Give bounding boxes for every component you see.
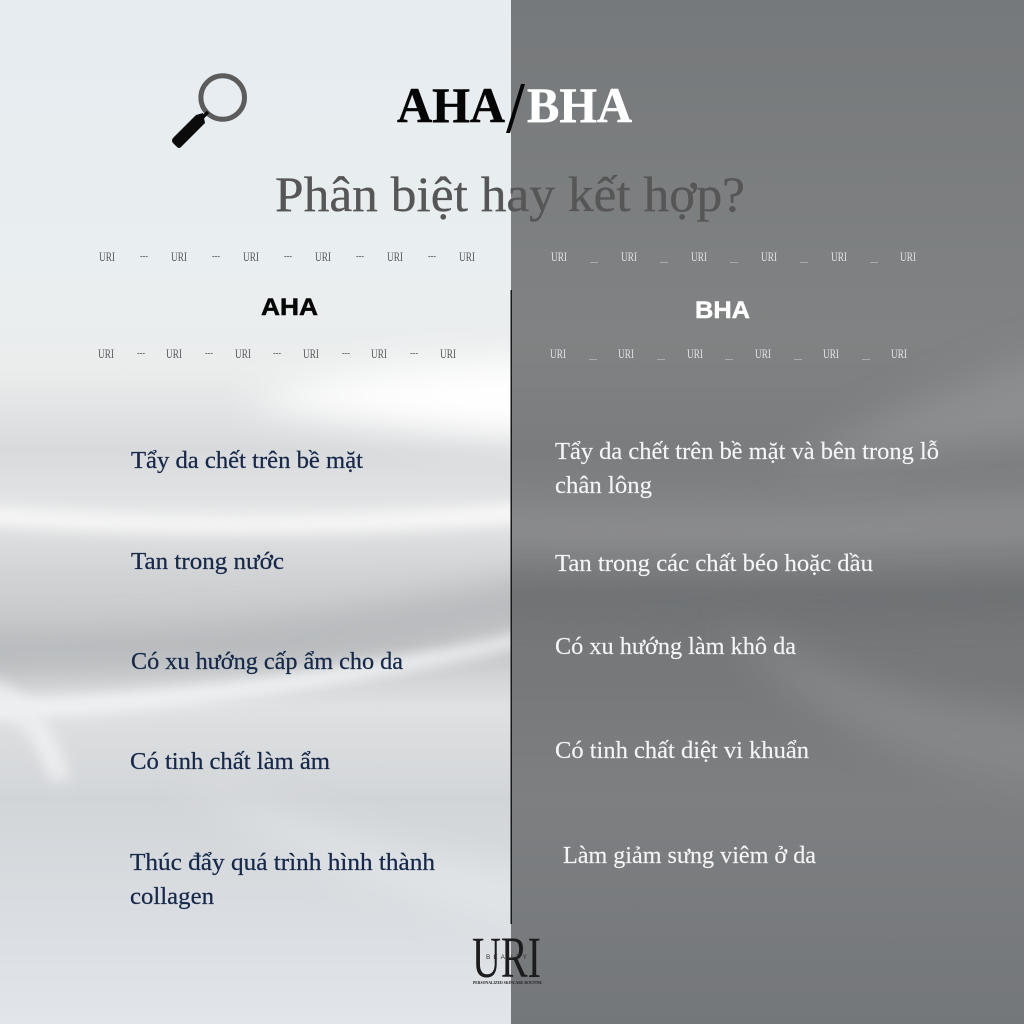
title: AHA/BHA [397, 77, 632, 133]
watermark row: lower left: --- [273, 348, 281, 359]
watermark row: top right: ___ [589, 255, 599, 264]
AHA item: hydration: Có xu hướng cấp ẩm cho da [131, 648, 403, 675]
logo: URI Beauty: URI [472, 925, 541, 990]
subtitle: Phân biệt hay kết hợp?: Phân biệt hay kết hợp? [275, 166, 745, 222]
watermark row: top left: URI [315, 249, 331, 264]
BHA item: exfoliation: chân lông [555, 472, 652, 499]
watermark row: top left: --- [212, 251, 220, 262]
watermark row: lower right: ___ [861, 352, 871, 361]
BHA item: solubility: Tan trong các chất béo hoặc dầu [555, 550, 873, 577]
BHA item: anti-inflammatory: Làm giảm sưng viêm ở da [563, 842, 816, 869]
BHA item: exfoliation: Tẩy da chết trên bề mặt và bên trong lỗ [555, 438, 939, 465]
panel: left light background [0, 0, 560, 1024]
watermark row: lower left: --- [205, 348, 213, 359]
watermark row: lower left: --- [410, 348, 418, 359]
watermark row: lower left [98, 346, 456, 361]
watermark row: top left: URI [387, 249, 403, 264]
icon: magnifying glass [172, 76, 244, 148]
logo: URI Beauty: PERSONALIZED SKINCARE ROUTINE [473, 980, 542, 985]
watermark row: top left: URI [243, 249, 259, 264]
AHA list [130, 447, 435, 910]
watermark row: top left: URI [99, 249, 115, 264]
watermark row: lower right: URI [618, 346, 634, 361]
watermark row: top left: --- [428, 251, 436, 262]
watermark row: top right: URI [831, 249, 847, 264]
watermark row: lower right: URI [550, 346, 566, 361]
watermark row: lower right: ___ [793, 352, 803, 361]
AHA item: collagen [130, 849, 435, 910]
AHA item: exfoliation: Tẩy da chết trên bề mặt [131, 447, 363, 474]
watermark row: top right: ___ [659, 255, 669, 264]
AHA item: collagen: Thúc đẩy quá trình hình thành [130, 849, 435, 876]
watermark row: top left [99, 249, 475, 264]
panel: right dark background [470, 0, 1024, 1024]
AHA item: moisturising: Có tinh chất làm ẩm [130, 748, 330, 775]
BHA list [555, 438, 939, 869]
AHA item: solubility: Tan trong nước [131, 548, 284, 575]
watermark row: top left: URI [459, 249, 475, 264]
title: AHA/BHA: AHA [397, 77, 505, 133]
watermark row: top left: --- [356, 251, 364, 262]
divider line [510, 290, 512, 924]
watermark row: lower left: URI [98, 346, 114, 361]
watermark row: top right [551, 249, 916, 264]
watermark row: top right: ___ [799, 255, 809, 264]
watermark row: top right: URI [900, 249, 916, 264]
watermark row: top left: URI [171, 249, 187, 264]
watermark row: lower left: --- [137, 348, 145, 359]
watermark row: lower right: URI [687, 346, 703, 361]
watermark row: top right: URI [761, 249, 777, 264]
watermark row: lower right: URI [823, 346, 839, 361]
watermark row: top right: ___ [869, 255, 879, 264]
watermark row: top left: --- [140, 251, 148, 262]
watermark row: top right: URI [621, 249, 637, 264]
watermark row: lower right: ___ [724, 352, 734, 361]
BHA item: antibacterial: Có tinh chất diệt vi khuẩn [555, 737, 809, 764]
watermark row: lower right: URI [755, 346, 771, 361]
watermark row: top right: URI [551, 249, 567, 264]
title: AHA/BHA: BHA [527, 77, 632, 133]
BHA item: drying: Có xu hướng làm khô da [555, 633, 796, 660]
watermark row: lower right: ___ [656, 352, 666, 361]
watermark row: lower left: URI [166, 346, 182, 361]
watermark row: lower right: ___ [588, 352, 598, 361]
watermark row: lower right: URI [891, 346, 907, 361]
watermark row: top right: URI [691, 249, 707, 264]
column heading: AHA: AHA [261, 294, 318, 321]
watermark row: top right: ___ [729, 255, 739, 264]
watermark row: lower left: URI [235, 346, 251, 361]
column heading: BHA: BHA [695, 297, 750, 324]
AHA item: collagen: collagen [130, 883, 214, 910]
BHA item: exfoliation [555, 438, 939, 499]
watermark row: lower left: URI [440, 346, 456, 361]
watermark row: lower right [550, 346, 907, 361]
watermark row: lower left: URI [303, 346, 319, 361]
watermark row: lower left: URI [371, 346, 387, 361]
watermark row: top left: --- [284, 251, 292, 262]
watermark row: lower left: --- [342, 348, 350, 359]
logo: URI Beauty: BEAUTY [486, 954, 530, 961]
